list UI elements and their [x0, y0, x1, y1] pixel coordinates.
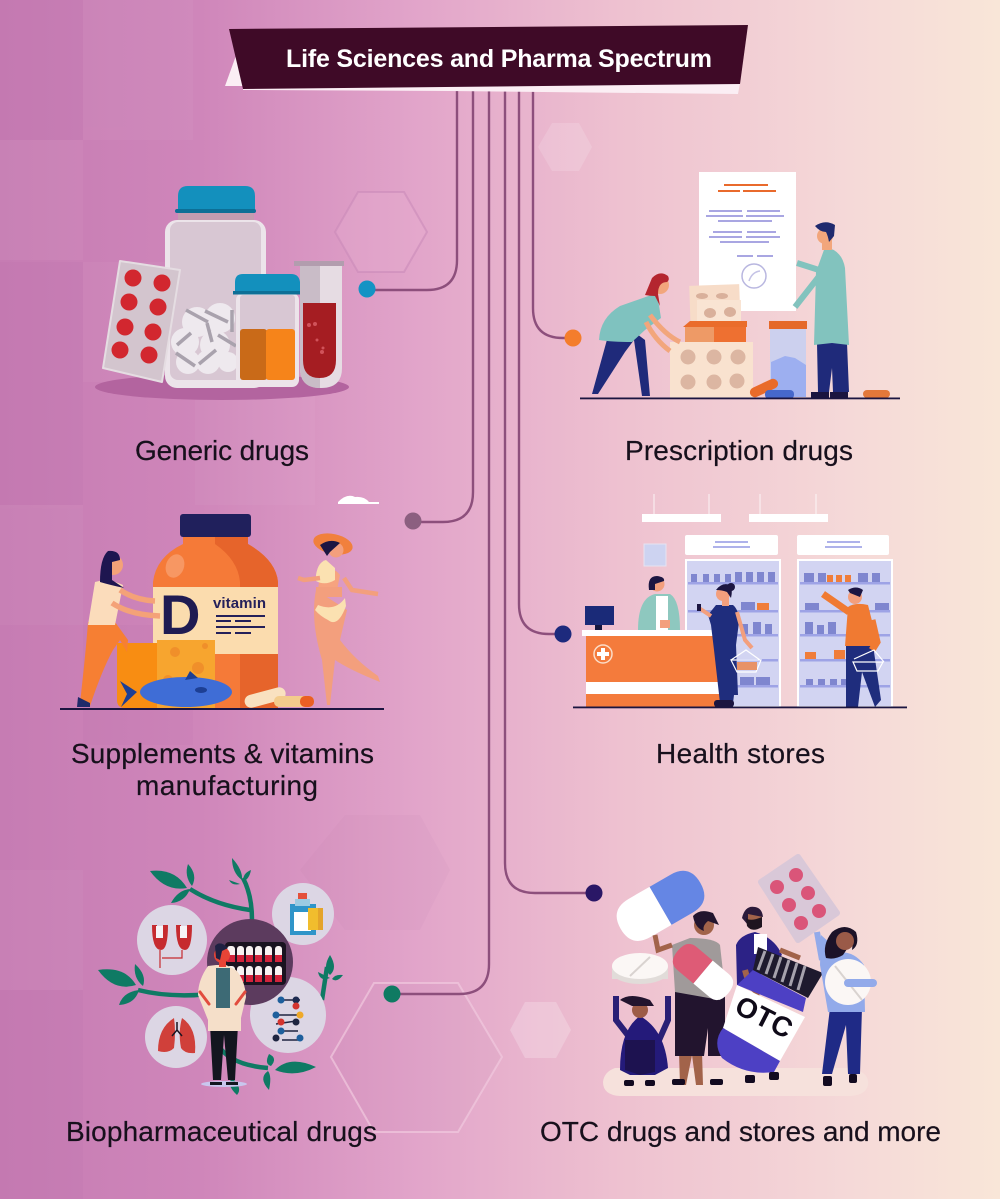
illustration: health stores	[573, 494, 907, 708]
label: supplements and vitamins manufacturing	[71, 738, 374, 801]
title banner: Life Sciences and Pharma Spectrum	[286, 45, 712, 73]
title banner	[225, 25, 748, 94]
connector dots	[358, 280, 602, 1002]
label: generic drugs: Generic drugs	[135, 435, 309, 466]
illustration: biopharmaceutical drugs	[98, 858, 343, 1095]
label: OTC drugs and stores and more: OTC drugs and stores and more	[540, 1116, 941, 1147]
illustration: OTC drugs: OTC	[730, 990, 798, 1045]
illustration: prescription drugs	[580, 172, 900, 399]
illustration: supplements and vitamins: D	[160, 583, 200, 646]
label: supplements and vitamins manufacturing: manufacturing	[136, 770, 318, 801]
illustration: generic drugs	[95, 186, 349, 400]
illustration: OTC drugs	[603, 857, 873, 1096]
connector lines	[367, 90, 594, 994]
label: health stores: Health stores	[656, 738, 825, 769]
label: biopharmaceutical drugs: Biopharmaceutical drugs	[66, 1116, 377, 1147]
label: supplements and vitamins manufacturing: Supplements & vitamins	[71, 738, 374, 769]
illustration: supplements and vitamins	[60, 496, 384, 710]
label: prescription drugs: Prescription drugs	[625, 435, 853, 466]
illustration: supplements and vitamins: vitamin	[213, 595, 266, 612]
